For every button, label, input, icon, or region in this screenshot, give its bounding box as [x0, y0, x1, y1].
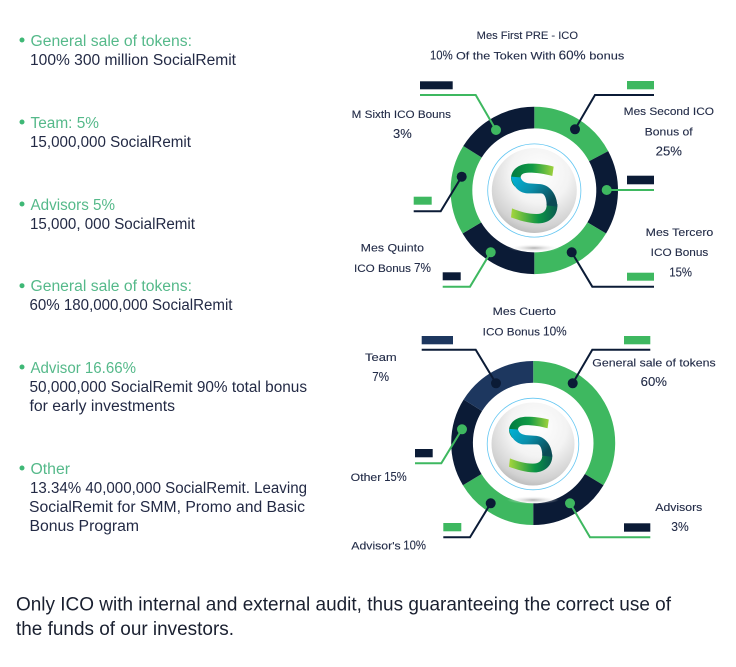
logo: S emblem on sphere [487, 398, 579, 504]
list item: other: Other [30, 461, 70, 478]
list item: advisor 16.66%: for early investments [30, 398, 175, 415]
list item: advisors 5%: Advisors 5% [30, 197, 115, 214]
callout: pre-ICO title [430, 30, 625, 62]
list item: general sale of tokens 60%: General sale of tokens: [30, 278, 192, 295]
callout: other [351, 424, 467, 484]
callout: advisor's: 10% [403, 538, 426, 553]
callout: other: Other [351, 472, 382, 484]
callout: month six: 3% [393, 126, 412, 141]
list item: general sale of tokens 60% [20, 278, 233, 314]
list item: advisors 5% [20, 197, 196, 233]
list item: other: Bonus Program [30, 518, 139, 535]
list item: other: SocialRemit for SMM, Promo and Basic [29, 499, 305, 516]
callout: month three: 15% [669, 264, 692, 279]
callout: advisors [565, 498, 703, 537]
callout: month two: 25% [656, 144, 682, 159]
callout: advisors: Advisors [655, 502, 703, 514]
callout: pre-ICO title: bonus [589, 50, 625, 62]
callout: month three: ICO Bonus [651, 247, 709, 259]
list item: team 5% [20, 115, 192, 151]
callout: month two: Mes Second ICO [624, 106, 714, 118]
callout: advisor's: Advisor's [351, 541, 401, 553]
callout: team: Team [365, 352, 397, 364]
ring segments [461, 118, 607, 263]
list item: general sale of tokens 100%: General sale of tokens: [30, 33, 192, 50]
callout: month five: 7% [414, 260, 431, 275]
callout: month four title [483, 306, 567, 338]
list item: team 5%: 15,000,000 SocialRemit [30, 134, 192, 151]
callout: pre-ICO title: 10% [430, 47, 453, 62]
logo: S emblem on sphere [488, 144, 581, 252]
callout: month six: M Sixth ICO Bouns [352, 109, 452, 121]
list item: advisor 16.66%: 50,000,000 SocialRemit 90% total bonus [30, 379, 307, 396]
footer note: the funds of our investors. [16, 618, 234, 640]
callout: month five [354, 243, 496, 287]
list item: general sale of tokens 100% [20, 33, 237, 69]
callout: month four title: ICO Bonus [483, 326, 541, 338]
chart: token allocation donut [462, 372, 604, 514]
callout: pre-ICO title: Of the Token With [456, 50, 556, 62]
callout: other: 15% [384, 469, 407, 484]
callout: month five: Mes Quinto [361, 243, 424, 255]
callout: team [365, 336, 501, 388]
callout: general sale of tokens: 60% [641, 374, 667, 389]
list item: general sale of tokens 60%: 60% 180,000,000 SocialRemit [30, 297, 233, 314]
callout: general sale of tokens: General sale of tokens [592, 357, 716, 369]
callout: left marker [414, 172, 467, 211]
callout: month three: Mes Tercero [646, 227, 713, 239]
callout: team: 7% [372, 369, 389, 384]
footer note [16, 594, 672, 640]
callout: month six [352, 81, 501, 141]
chart: ICO bonus donut [461, 118, 607, 263]
callout: month two [570, 81, 714, 159]
list item: general sale of tokens 100%: 100% 300 million SocialRemit [30, 52, 237, 69]
callout: general sale of tokens [568, 336, 716, 389]
callout: pre-ICO title: Mes First PRE - ICO [477, 30, 578, 42]
callout: month two: Bonus of [645, 126, 694, 138]
list item: other [20, 461, 307, 535]
callout: month three [567, 227, 713, 287]
callout: pre-ICO title: 60% [559, 47, 586, 62]
callout: month four title: 10% [543, 323, 567, 338]
list item: advisors 5%: 15,000, 000 SocialRemit [30, 216, 196, 233]
callout: advisor's [351, 498, 496, 553]
callout: advisors: 3% [671, 519, 689, 534]
callout: month four title: Mes Cuerto [493, 306, 556, 318]
footer note: Only ICO with internal and external audit, thus guaranteeing the correct use of [16, 594, 672, 616]
list item: other: 13.34% 40,000,000 SocialRemit. Leaving [30, 480, 307, 497]
list item: advisor 16.66%: Advisor 16.66% [30, 360, 136, 377]
list item: advisor 16.66% [20, 360, 307, 415]
callout: month five: ICO Bonus [354, 263, 412, 275]
ring segments [462, 372, 604, 514]
callout: right marker [602, 176, 654, 195]
list item: team 5%: Team: 5% [30, 115, 99, 132]
